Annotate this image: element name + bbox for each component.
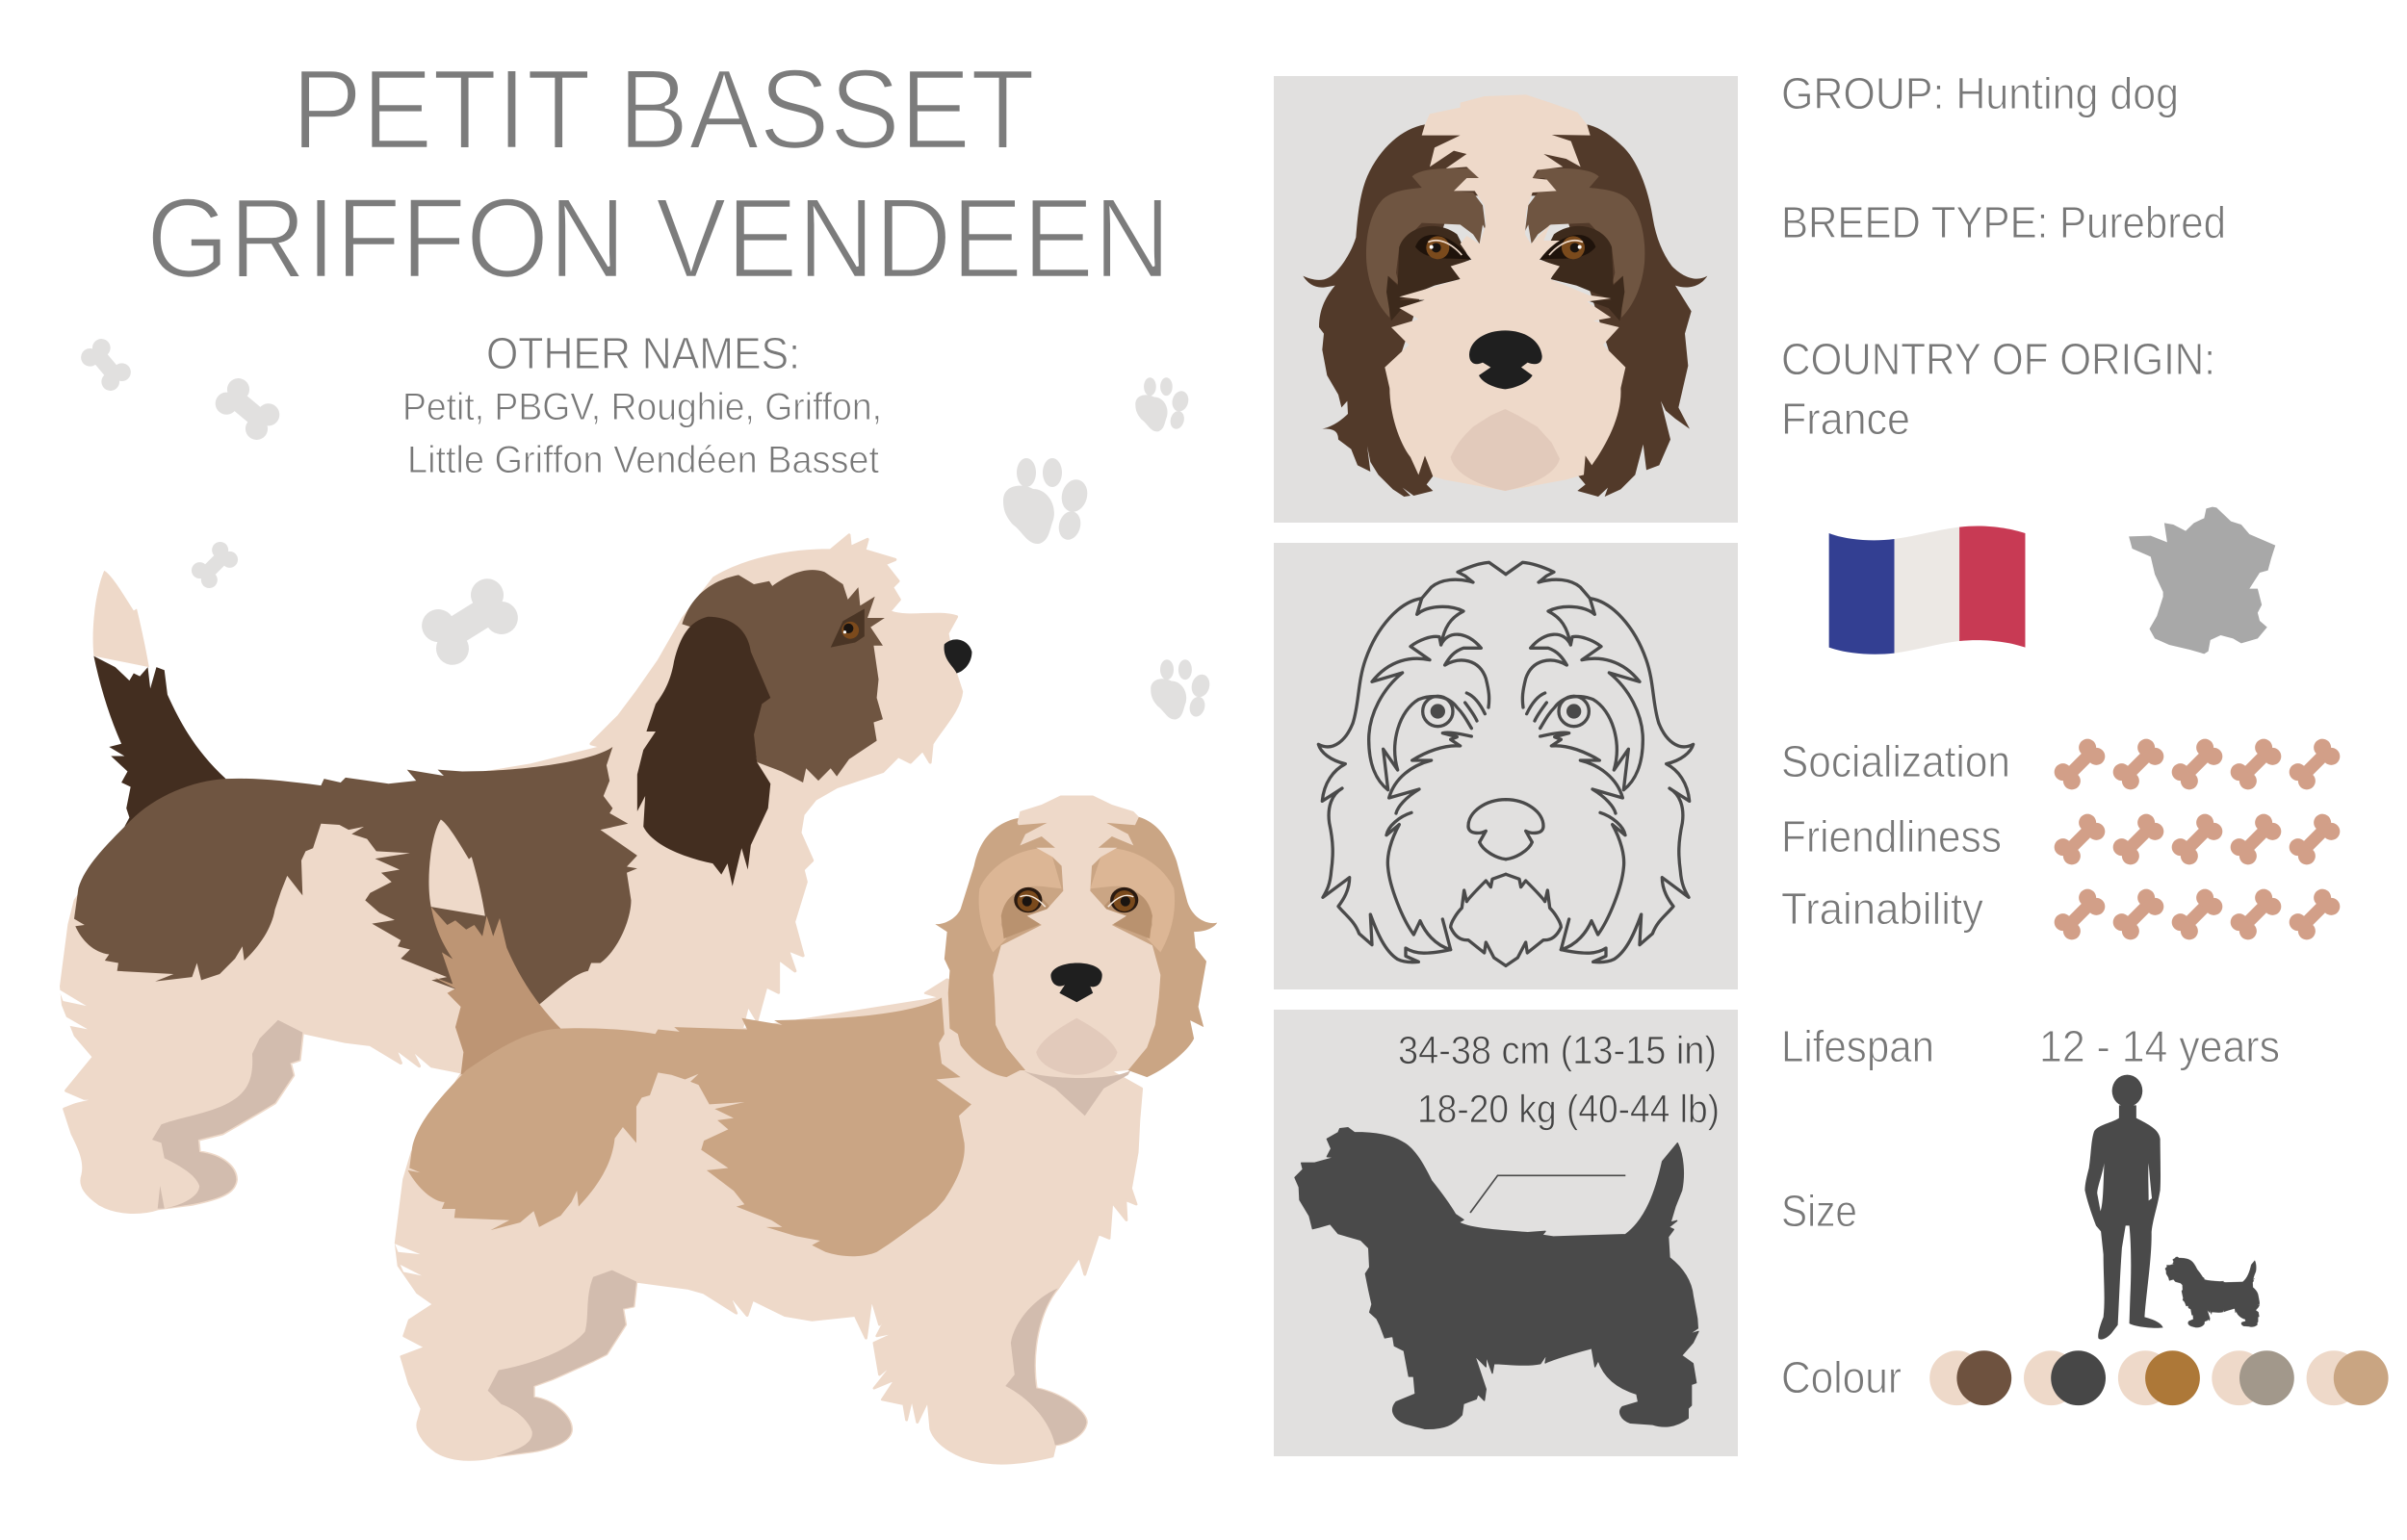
panel: line drawing head	[1274, 543, 1738, 989]
title	[146, 46, 1171, 302]
panel: coloured head	[1274, 76, 1738, 523]
rating: socialization	[1781, 735, 2343, 793]
icon: French flag	[1829, 526, 2025, 654]
colour swatches	[1781, 1350, 2389, 1405]
panel: silhouette with height and weight: 34-38 cm (13-15 in)	[1398, 1028, 1717, 1072]
rating: friendliness: Friendliness	[1781, 811, 2002, 861]
other names text block: Petit, PBGV, Roughie, Griffon,	[402, 386, 882, 428]
size comparison: label, human and dog silhouettes	[1781, 1075, 2260, 1340]
icon: map of France	[2129, 507, 2275, 654]
text: breed facts: COUNTRY OF ORIGIN:	[1781, 334, 2215, 384]
size comparison: label, human and dog silhouettes: Size	[1781, 1186, 1857, 1236]
text: breed facts	[1781, 68, 2226, 444]
panel: silhouette with height and weight: 18-20 kg (40-44 lb)	[1417, 1087, 1720, 1131]
rating: socialization: Socialization	[1781, 736, 2010, 786]
text: lifespan: Lifespan	[1781, 1021, 1934, 1071]
background icons: bones and paws	[77, 335, 1212, 720]
other names text block: Little Griffon Vendéen Basset	[407, 439, 879, 481]
text: breed facts: BREED TYPE: Purebred	[1781, 197, 2226, 247]
text: lifespan: 12 - 14 years	[2039, 1021, 2280, 1071]
other names text block	[402, 328, 882, 481]
title: PETIT BASSET	[292, 46, 1035, 173]
text: breed facts: France	[1781, 394, 1910, 444]
title: GRIFFON VENDEEN	[146, 175, 1171, 302]
illustration: brown and cream dog	[59, 535, 971, 1212]
rating: trainability	[1781, 884, 2343, 943]
rating: trainability: Trainability	[1781, 884, 1983, 934]
rating: friendliness	[1781, 810, 2343, 868]
colour swatches: Colour	[1781, 1352, 1902, 1402]
other names text block: OTHER NAMES:	[486, 328, 800, 378]
text: breed facts: GROUP: Hunting dog	[1781, 68, 2179, 118]
text: lifespan	[1781, 1021, 2280, 1071]
panel: silhouette with height and weight	[1274, 1010, 1738, 1456]
illustration: tan and cream dog	[395, 796, 1217, 1463]
